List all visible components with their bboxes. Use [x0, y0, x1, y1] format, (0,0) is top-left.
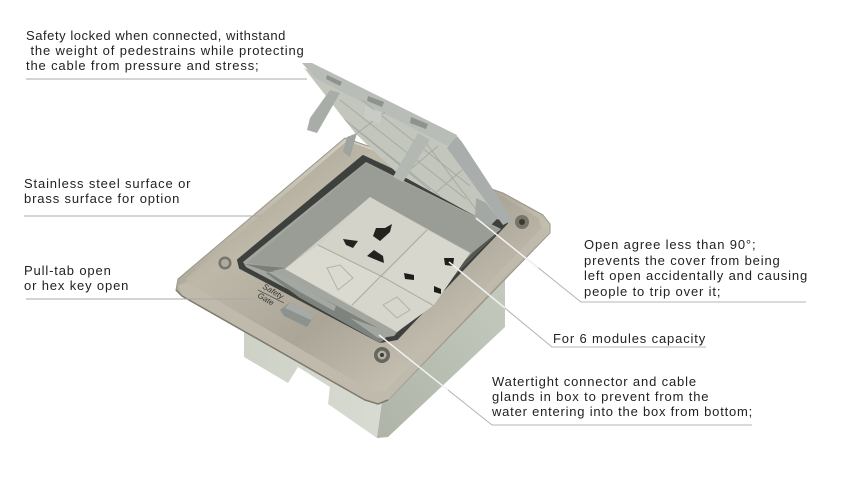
product illustration: floor socket box: [24, 63, 806, 438]
text: watertight: Watertight connector and cable glands in box to prevent from the water entering into the box from bottom;: [492, 374, 753, 419]
plate screws: [218, 215, 529, 363]
text: modules capacity: For 6 modules capacity: [553, 331, 706, 346]
safety-gate label and tab: Safety: [261, 282, 286, 302]
safety-gate label and tab: Gate: [256, 291, 276, 308]
leader: open angle highlight: [476, 218, 538, 268]
plate opening with inner box: [238, 156, 507, 342]
leader: pull-tab: [26, 298, 258, 300]
leader: watertight highlight: [379, 335, 448, 390]
text: stainless steel: Stainless steel surface or brass surface for option: [24, 176, 191, 206]
stainless steel plate: [176, 138, 550, 404]
leader: modules highlight: [449, 262, 505, 308]
universal socket holes: [343, 224, 392, 263]
leader lines: [24, 79, 806, 425]
socket modules: [285, 197, 470, 332]
leader: open angle: [476, 218, 806, 302]
text: safety lock: Safety locked when connected, withstand the weight of pedestrains while protecting the cable from pressure and stress;: [26, 28, 305, 73]
leader: watertight: [379, 335, 752, 425]
box body: [244, 275, 505, 438]
safety latch strip: [266, 271, 386, 343]
open lid: [302, 63, 513, 226]
safety-gate label and tab: [256, 282, 315, 327]
leader: modules: [449, 262, 706, 347]
text: open angle: Open agree less than 90°; prevents the cover from being left open accidentally and causing people to trip over it;: [584, 237, 808, 298]
leader: steel surface: [24, 215, 262, 217]
leader: lid: [26, 78, 307, 80]
blank module squares: [327, 265, 410, 318]
text: pull-tab: Pull-tab open or hex key open: [24, 263, 129, 293]
square socket holes: [404, 258, 454, 294]
